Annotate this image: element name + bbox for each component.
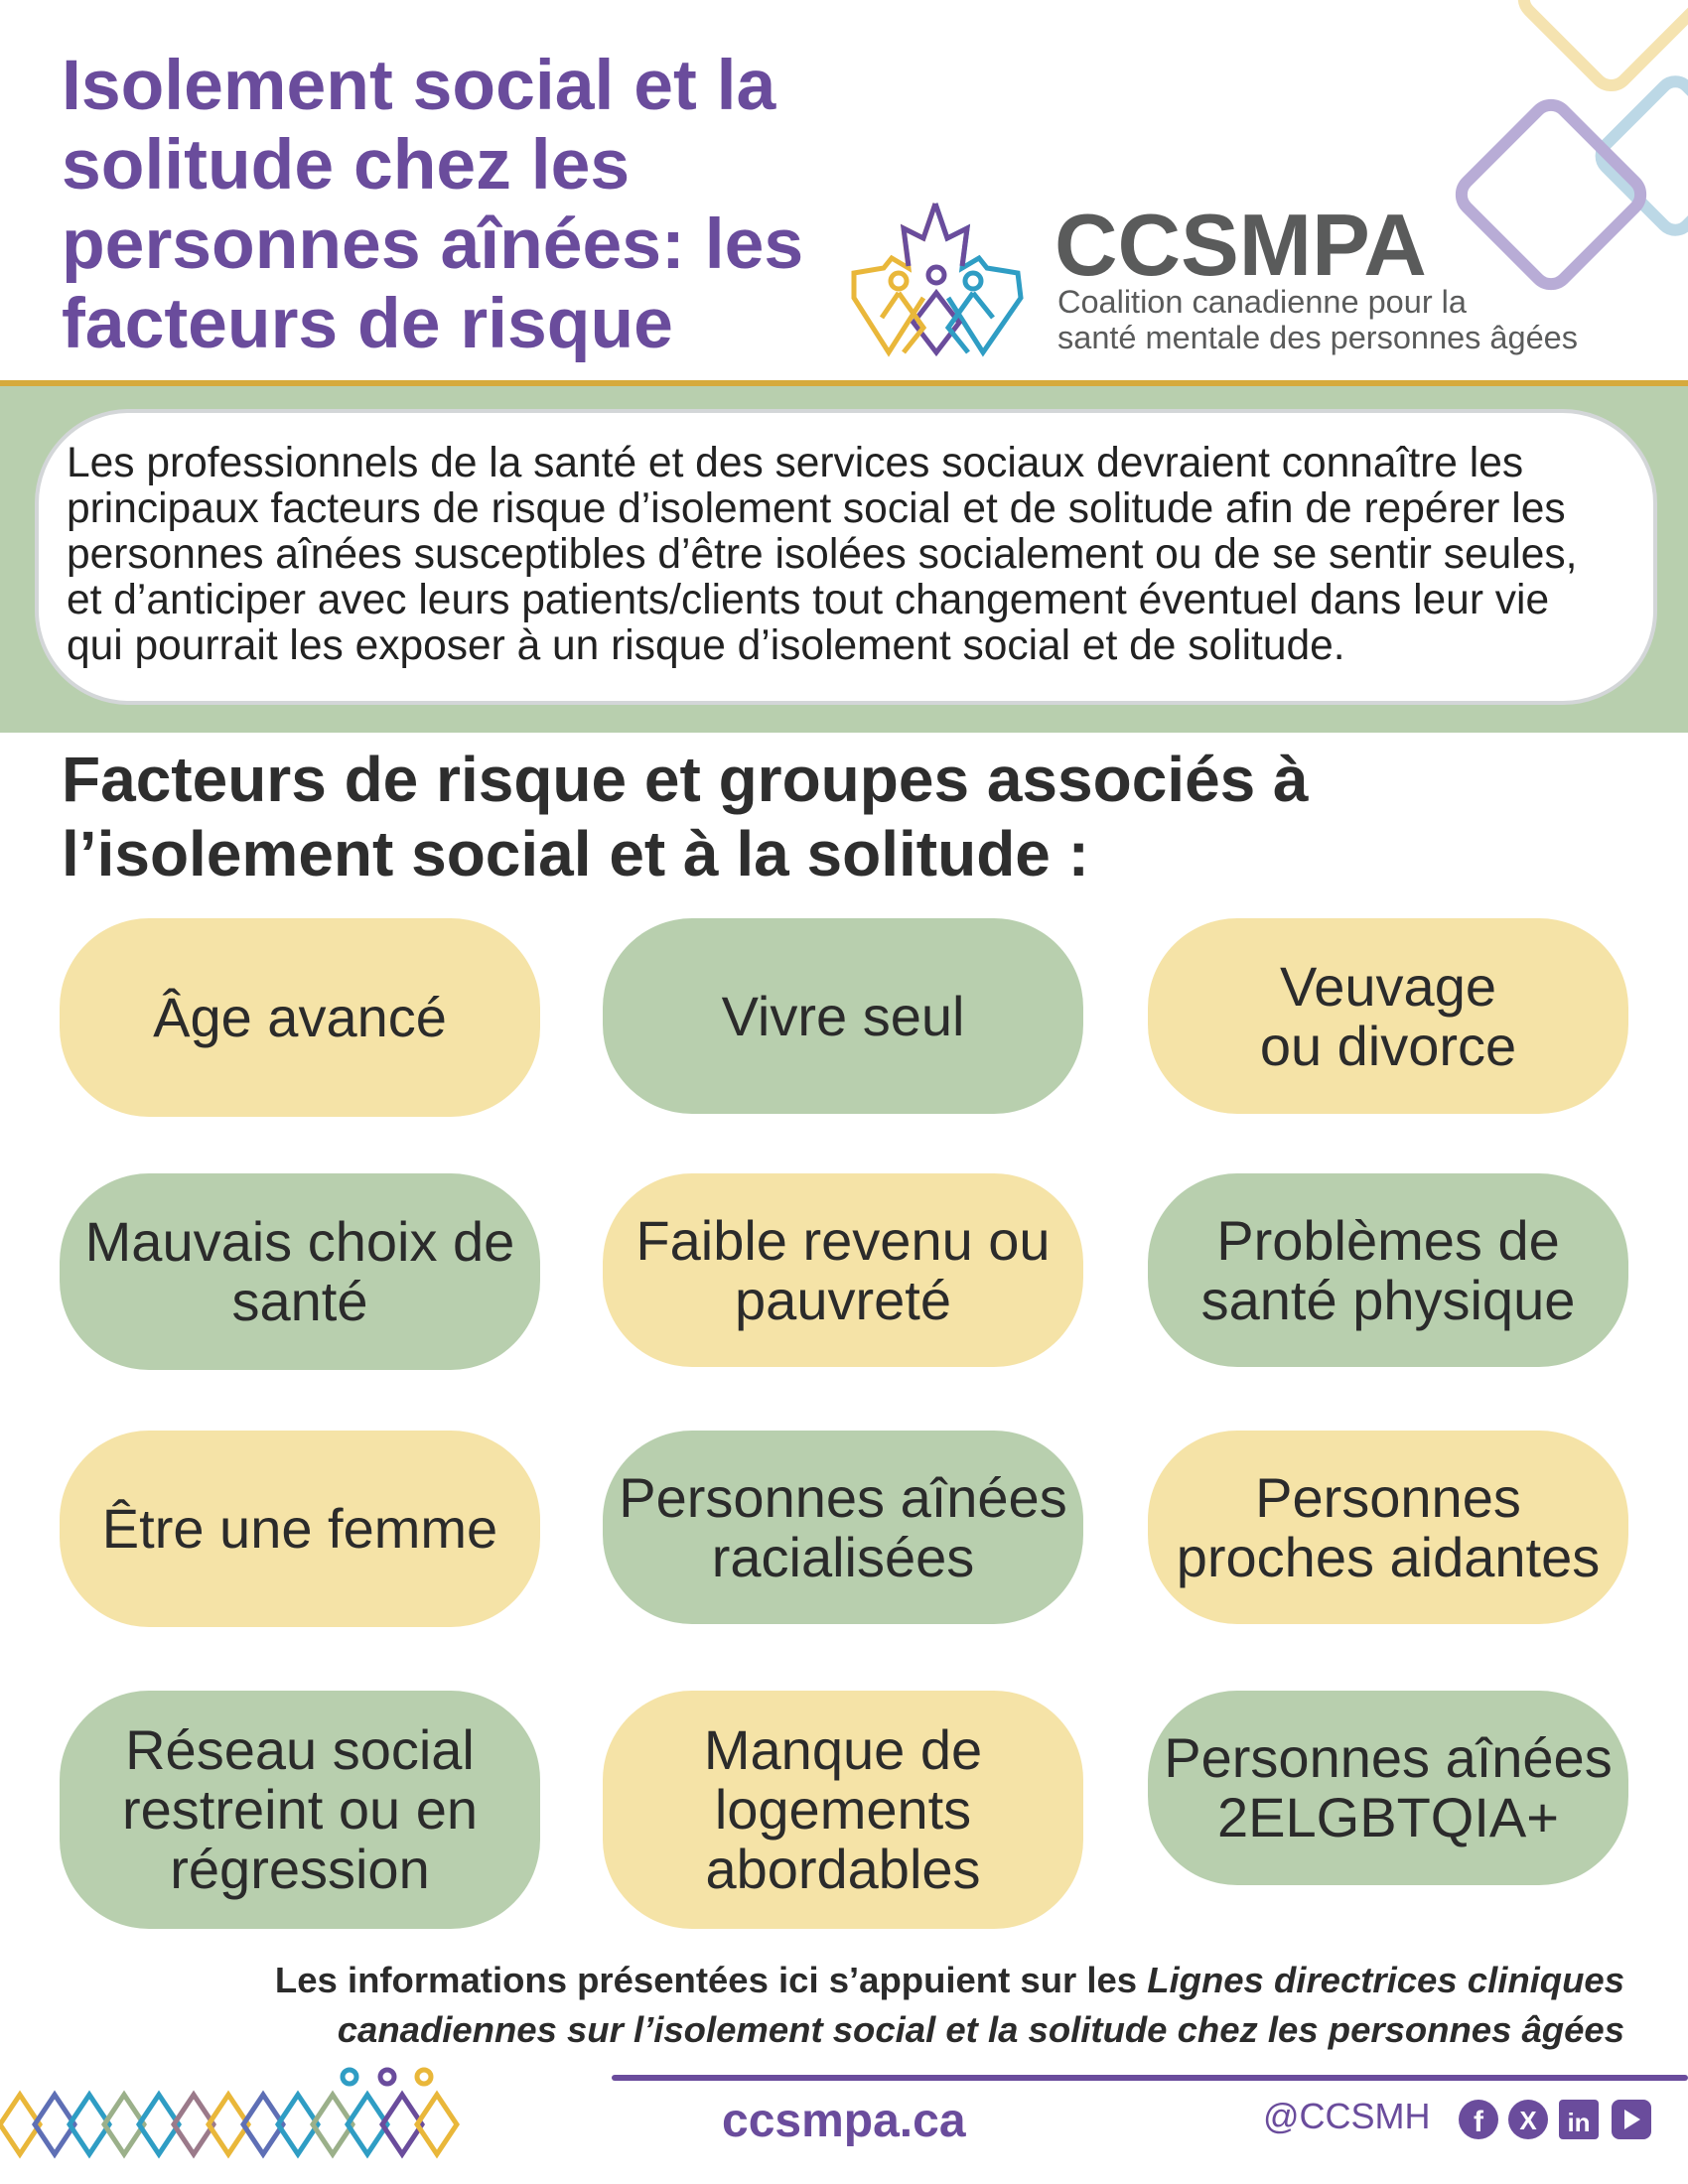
source note: Les informations présentées ici s’appuient sur les Lignes directrices cliniques xyxy=(275,1960,1624,2000)
pill: logements: Manque de xyxy=(704,1718,982,1781)
heading: risk factors: l’isolement social et à la solitude : xyxy=(62,818,1089,889)
title: facteurs de risque xyxy=(62,284,673,363)
heading: risk factors: Facteurs de risque et groupes associés à xyxy=(62,744,1309,815)
panel: intro band xyxy=(0,386,1688,733)
title: personnes aînées: les xyxy=(62,205,803,284)
social icons: f xyxy=(1474,2106,1484,2138)
title: Isolement social et la xyxy=(62,46,775,125)
pill: réseau social: Réseau social xyxy=(125,1718,475,1781)
pill: proches aidantes: proches aidantes xyxy=(1177,1525,1600,1588)
pill: réseau social xyxy=(60,1691,540,1929)
pill: problèmes physique: santé physique xyxy=(1201,1269,1575,1330)
pill: racialisées: racialisées xyxy=(712,1525,974,1588)
gold divider xyxy=(0,380,1688,386)
intro text box: principaux facteurs de risque d’isolement social et de solitude afin de repérer les xyxy=(67,485,1566,532)
pill: age: Âge avancé xyxy=(153,986,447,1048)
pill: faible revenu: pauvreté xyxy=(735,1269,951,1330)
pill: veuvage xyxy=(1148,918,1628,1114)
source note xyxy=(275,1960,1624,2050)
intro text box: qui pourrait les exposer à un risque d’isolement social et de solitude. xyxy=(67,622,1345,669)
footer chain decoration xyxy=(0,2067,460,2158)
pill: age xyxy=(60,918,540,1117)
pill: veuvage: ou divorce xyxy=(1260,1015,1516,1076)
title xyxy=(62,46,803,363)
pill: 2ELGBTQIA+ xyxy=(1148,1691,1628,1885)
title: solitude chez les xyxy=(62,125,630,205)
pill: femme xyxy=(60,1431,540,1627)
handle: @CCSMH xyxy=(1263,2096,1431,2136)
social icons: X xyxy=(1519,2106,1537,2135)
icon: maple leaf with people xyxy=(852,203,1024,357)
pill: racialisées xyxy=(603,1431,1083,1624)
intro text box: et d’anticiper avec leurs patients/clients tout changement éventuel dans leur vie xyxy=(67,577,1549,623)
intro text box xyxy=(35,409,1657,705)
intro text box: personnes aînées susceptibles d’être isolées socialement ou de se sentir seules, xyxy=(67,531,1577,578)
pill: faible revenu: Faible revenu ou xyxy=(635,1209,1051,1271)
pill: mauvais choix: Mauvais choix de xyxy=(85,1210,514,1273)
pill: logements: logements xyxy=(715,1778,971,1841)
pill: proches aidantes: Personnes xyxy=(1255,1465,1521,1529)
pill: mauvais choix: santé xyxy=(231,1270,367,1332)
decorative diamonds top right xyxy=(1456,0,1688,290)
purple footer line xyxy=(612,2075,1688,2081)
social icons: in xyxy=(1567,2108,1591,2137)
pill: réseau social: régression xyxy=(170,1838,430,1900)
pill: faible revenu xyxy=(603,1173,1083,1367)
pill: proches aidantes xyxy=(1148,1431,1628,1624)
logo: santé mentale des personnes âgées xyxy=(1057,320,1578,355)
pill: veuvage: Veuvage xyxy=(1280,955,1496,1017)
pill: racialisées: Personnes aînées xyxy=(619,1465,1067,1529)
website: ccsmpa.ca xyxy=(722,2095,966,2147)
logo xyxy=(852,196,1578,357)
pill: femme: Être une femme xyxy=(102,1497,497,1560)
pill: réseau social: restreint ou en xyxy=(122,1778,478,1841)
pill: 2ELGBTQIA+: 2ELGBTQIA+ xyxy=(1217,1786,1559,1848)
pill: 2ELGBTQIA+: Personnes aînées xyxy=(1164,1726,1613,1789)
pill: mauvais choix xyxy=(60,1173,540,1370)
pill: vivre seul xyxy=(603,918,1083,1114)
pill: logements: abordables xyxy=(705,1838,981,1900)
heading: risk factors xyxy=(62,744,1309,889)
pill: problèmes physique xyxy=(1148,1173,1628,1367)
social icons xyxy=(1459,2100,1651,2139)
source note: canadiennes sur l’isolement social et la solitude chez les personnes âgées xyxy=(338,2009,1624,2050)
intro text box: Les professionnels de la santé et des services sociaux devraient connaître les xyxy=(67,440,1523,486)
pill: problèmes physique: Problèmes de xyxy=(1216,1209,1560,1271)
pill grid xyxy=(60,918,1628,1929)
logo text: CCSMPA xyxy=(1055,196,1427,294)
logo: Coalition canadienne pour la xyxy=(1057,284,1467,320)
pill: vivre seul: Vivre seul xyxy=(722,985,964,1046)
pill: logements xyxy=(603,1691,1083,1929)
